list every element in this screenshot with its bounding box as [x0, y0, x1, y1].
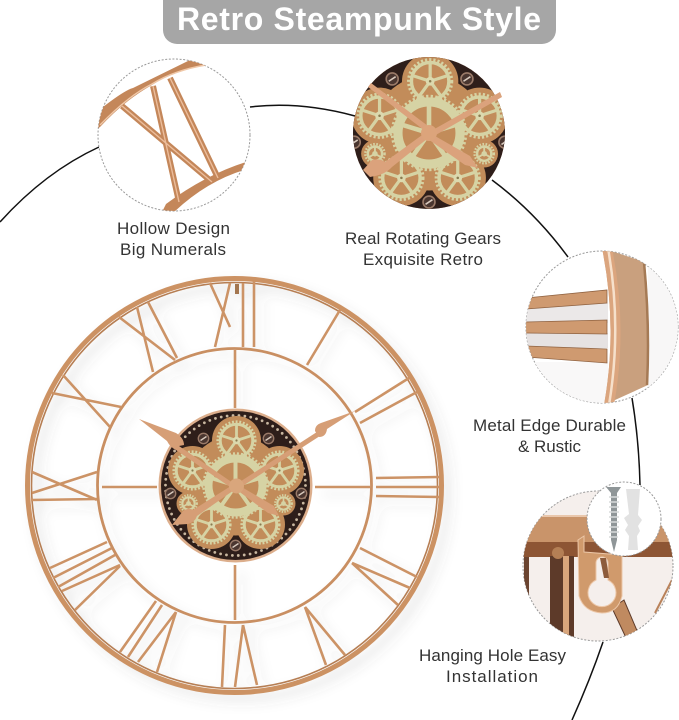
label: metal edge: Metal Edge Durable: [473, 416, 626, 435]
detail circle: hanging hole: [520, 491, 679, 646]
spokes: [526, 290, 607, 309]
detail circle: hollow numerals: [94, 59, 250, 216]
zoomed clock hands: [363, 83, 502, 177]
inset: screw and wall anchor: [587, 482, 661, 556]
label: metal edge: [473, 416, 626, 456]
label: real rotating gears: Exquisite Retro: [363, 250, 483, 269]
keyhole bracket: [578, 536, 622, 613]
label: hanging hole: [419, 646, 566, 686]
label: real rotating gears: Real Rotating Gears: [345, 229, 501, 248]
detail circle: rotating gears: [353, 57, 505, 209]
detail circle: metal edge: [525, 248, 679, 407]
label: hollow design: Hollow Design: [117, 219, 230, 238]
label: hanging hole: Installation: [446, 667, 538, 686]
wall anchor: [624, 489, 642, 550]
rim band: [602, 248, 649, 405]
label: real rotating gears: [345, 229, 501, 269]
label: hollow design: Big Numerals: [120, 240, 226, 259]
label: hollow design: [117, 219, 230, 259]
clock frame and numerals: [28, 278, 442, 692]
wall clock: [28, 278, 442, 692]
label: metal edge: & Rustic: [518, 437, 582, 456]
center gear mechanism: [158, 408, 312, 562]
screw: [606, 487, 621, 552]
frame bars: [550, 556, 574, 637]
title banner: Retro Steampunk Style: [177, 1, 541, 37]
clock hands: [139, 411, 355, 525]
label: hanging hole: Hanging Hole Easy: [419, 646, 566, 665]
